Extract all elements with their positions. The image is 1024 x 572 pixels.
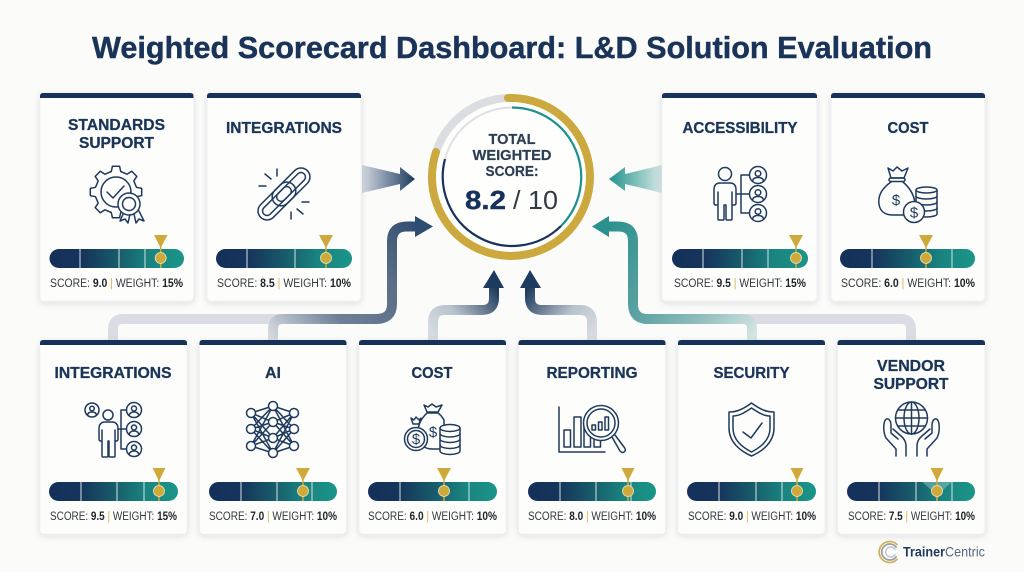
icon: money bag and coins: $ [910,204,919,222]
icon: money bags and coins: $ [412,431,421,448]
score bar [528,468,656,501]
icon: globe in hands [884,402,939,456]
logo: TrainerCentric [879,542,985,562]
score bar [847,468,975,501]
title: Weighted Scorecard Dashboard: L&D Solution Evaluation [92,30,932,65]
connector: integrations feed [113,319,285,342]
score bar [50,235,184,268]
panel: AI [200,340,346,534]
arrow: cost to gauge [433,270,504,342]
icon: gear with rosette [90,166,144,223]
score and weight: SCORE: 9.0 | WEIGHT: 15% [50,278,183,290]
heading: AI [265,365,281,382]
connector: vendor support feed [745,319,911,342]
heading [874,358,949,393]
icon: money bags and coins [404,404,460,454]
panel: security [678,340,825,534]
score and weight: SCORE: 9.5 | WEIGHT: 15% [674,278,806,290]
score bar [672,235,808,268]
heading: SUPPORT [79,135,154,152]
total score value: 8.2 [465,185,506,215]
score and weight: SCORE: 6.0 | WEIGHT: 10% [841,278,975,290]
arrow: top-right card to gauge [609,165,662,193]
heading: INTEGRATIONS [226,120,342,137]
icon: shield with check [729,403,774,456]
score and weight: SCORE: 9.0 | WEIGHT: 10% [688,511,816,523]
panel: cost top [831,93,985,301]
icon: neural network [246,402,298,458]
panel: reporting [518,340,666,534]
heading: COST [888,120,929,137]
icon: money bag and coins [879,167,937,222]
icon: money bag and coins: $ [892,192,901,209]
score bar [216,235,352,268]
total score value [465,185,558,215]
score and weight: SCORE: 9.5 | WEIGHT: 15% [50,511,177,523]
heading: STANDARDS [68,117,165,134]
logo: TrainerCentric: TrainerCentric [903,544,985,560]
heading: REPORTING [546,365,638,382]
score bar [840,235,975,268]
panel: standards support [40,93,194,301]
total score value: / 10 [513,185,558,215]
icon: person with users [714,166,766,222]
icon: money bags and coins: $ [429,424,438,441]
heading: INTEGRATIONS [54,365,172,382]
arrow: left bottom group to gauge [273,216,433,342]
arrow: reporting to gauge [520,270,592,342]
gauge label: WEIGHTED [472,148,552,164]
panel: accessibility [662,93,817,301]
heading [68,117,165,152]
arrow: top-left card to gauge [362,165,415,193]
total score gauge [432,98,590,256]
icon: people network [85,402,142,457]
score and weight: SCORE: 6.0 | WEIGHT: 10% [368,511,497,523]
gauge label: TOTAL [488,132,536,148]
score bar [368,468,497,501]
score bar [209,468,337,501]
score and weight: SCORE: 8.0 | WEIGHT: 10% [528,511,656,523]
panel: cost bottom [359,340,506,534]
score bar [49,468,178,501]
score and weight: SCORE: 8.5 | WEIGHT: 10% [217,278,351,290]
panel: vendor support [838,340,985,534]
score bar [687,468,816,501]
score and weight: SCORE: 7.0 | WEIGHT: 10% [209,511,337,523]
heading: ACCESSIBILITY [682,120,798,137]
icon: chain link [254,164,314,224]
gauge label: SCORE: [486,164,538,180]
score and weight: SCORE: 7.5 | WEIGHT: 10% [848,511,975,523]
panel: integrations bottom [40,340,187,534]
heading: VENDOR [877,358,945,375]
heading: COST [412,365,453,382]
heading: SUPPORT [874,376,949,393]
panel: integrations top [207,93,361,301]
heading: SECURITY [714,365,790,382]
arrow: security to gauge [592,216,752,342]
icon: chart with magnifier [559,406,625,452]
gauge label [472,132,552,180]
